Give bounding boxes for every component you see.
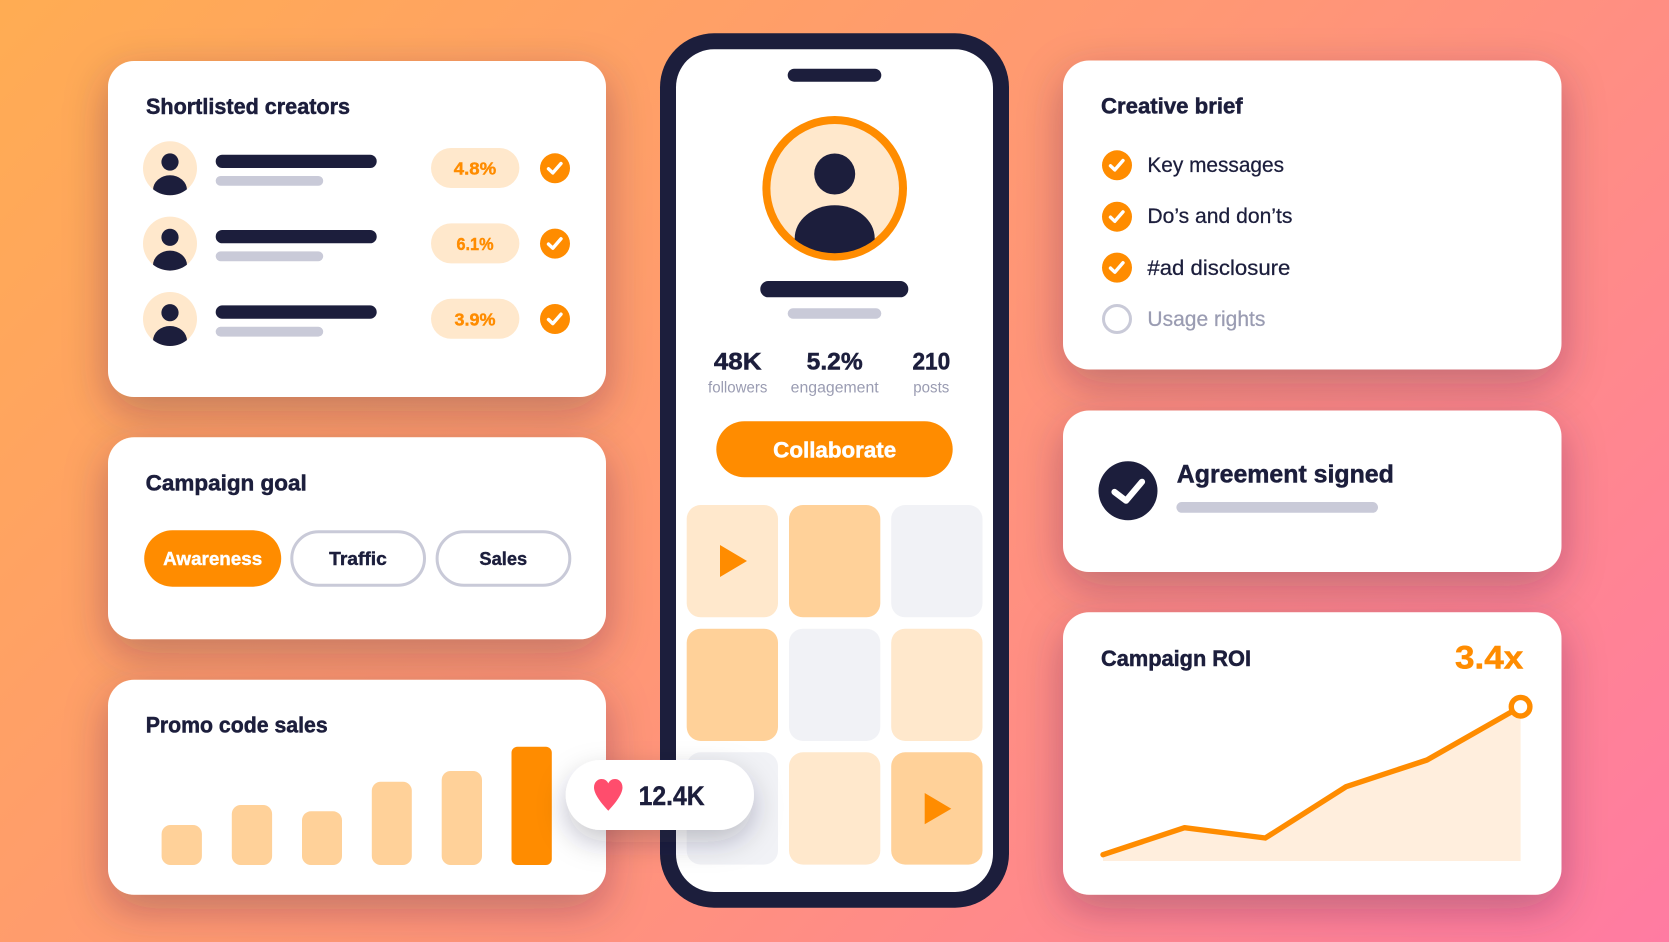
icon: avatar bbox=[143, 216, 197, 271]
icon: signed check bbox=[1098, 461, 1158, 520]
creator row 3 bbox=[143, 292, 570, 346]
heading: campaign ROI: Campaign ROI bbox=[1101, 646, 1251, 671]
engagement pill 4.8% bbox=[431, 148, 519, 188]
panel: campaign ROI bbox=[1063, 612, 1562, 895]
stat: followers: followers bbox=[708, 380, 768, 397]
panel: promo code sales bbox=[108, 680, 606, 895]
phone notch bbox=[788, 69, 881, 82]
likes count: 12.4K bbox=[639, 781, 705, 811]
stat: engagement bbox=[791, 348, 879, 397]
icon: check bbox=[540, 304, 570, 334]
checklist item: key messages: Key messages bbox=[1147, 154, 1284, 177]
ROI value: 3.4x bbox=[1455, 640, 1524, 676]
stat: engagement: 5.2% bbox=[807, 348, 863, 375]
icon: check bbox=[540, 229, 570, 259]
stat: followers: 48K bbox=[714, 348, 762, 375]
line chart bbox=[1103, 697, 1530, 861]
creator row 2 bbox=[143, 216, 570, 271]
engagement pill 3.9%: 3.9% bbox=[454, 309, 496, 329]
icon: heart bbox=[594, 779, 622, 811]
button: collaborate bbox=[716, 421, 953, 477]
button: sales: Sales bbox=[479, 549, 527, 569]
heading: shortlisted creators: Shortlisted creators bbox=[146, 94, 350, 119]
profile avatar bbox=[766, 120, 903, 271]
checklist item: do's and don'ts: Do’s and don’ts bbox=[1147, 205, 1292, 228]
content grid bbox=[687, 505, 982, 865]
stat: posts: 210 bbox=[912, 348, 950, 375]
checklist item: usage rights: Usage rights bbox=[1147, 308, 1265, 331]
creator row 1 bbox=[143, 141, 570, 196]
button: traffic bbox=[292, 532, 424, 585]
button: collaborate: Collaborate bbox=[773, 437, 896, 462]
panel: agreement signed bbox=[1063, 410, 1562, 572]
icon: avatar bbox=[143, 292, 197, 346]
checklist item: key messages bbox=[1102, 150, 1284, 180]
engagement pill 6.1%: 6.1% bbox=[456, 234, 494, 254]
heading: campaign goal: Campaign goal bbox=[146, 471, 307, 496]
video tile with play icon bbox=[687, 505, 778, 617]
engagement pill 3.9% bbox=[431, 299, 519, 339]
stat: posts bbox=[912, 348, 950, 397]
button: awareness: Awareness bbox=[163, 549, 262, 569]
heading: promo code sales: Promo code sales bbox=[146, 713, 328, 738]
checklist item: do's and don'ts bbox=[1102, 202, 1292, 232]
engagement pill 6.1% bbox=[431, 223, 519, 263]
signature placeholder bbox=[1176, 502, 1378, 513]
profile name placeholder bbox=[760, 281, 908, 297]
button: traffic: Traffic bbox=[329, 549, 387, 569]
badge: likes 12.4K bbox=[566, 760, 754, 830]
checklist item: usage rights bbox=[1104, 306, 1265, 332]
checklist item: #ad disclosure bbox=[1102, 253, 1290, 283]
button: awareness bbox=[144, 530, 281, 587]
icon: avatar bbox=[143, 141, 197, 196]
profile handle placeholder bbox=[788, 308, 881, 319]
checklist item: #ad disclosure: #ad disclosure bbox=[1147, 257, 1290, 280]
phone mockup bbox=[660, 33, 1009, 908]
bar chart bbox=[162, 747, 552, 865]
stat: posts: posts bbox=[913, 380, 950, 397]
engagement pill 4.8%: 4.8% bbox=[454, 159, 497, 179]
panel: campaign goal bbox=[108, 437, 606, 639]
video tile with play icon bbox=[891, 752, 982, 865]
icon: check bbox=[540, 153, 570, 183]
stat: engagement: engagement bbox=[791, 380, 879, 397]
panel: creative brief bbox=[1063, 60, 1562, 370]
button: sales bbox=[437, 532, 570, 585]
heading: creative brief: Creative brief bbox=[1101, 94, 1243, 119]
heading: agreement signed: Agreement signed bbox=[1177, 460, 1394, 488]
stat: followers bbox=[708, 348, 768, 397]
panel: shortlisted creators bbox=[108, 61, 606, 397]
